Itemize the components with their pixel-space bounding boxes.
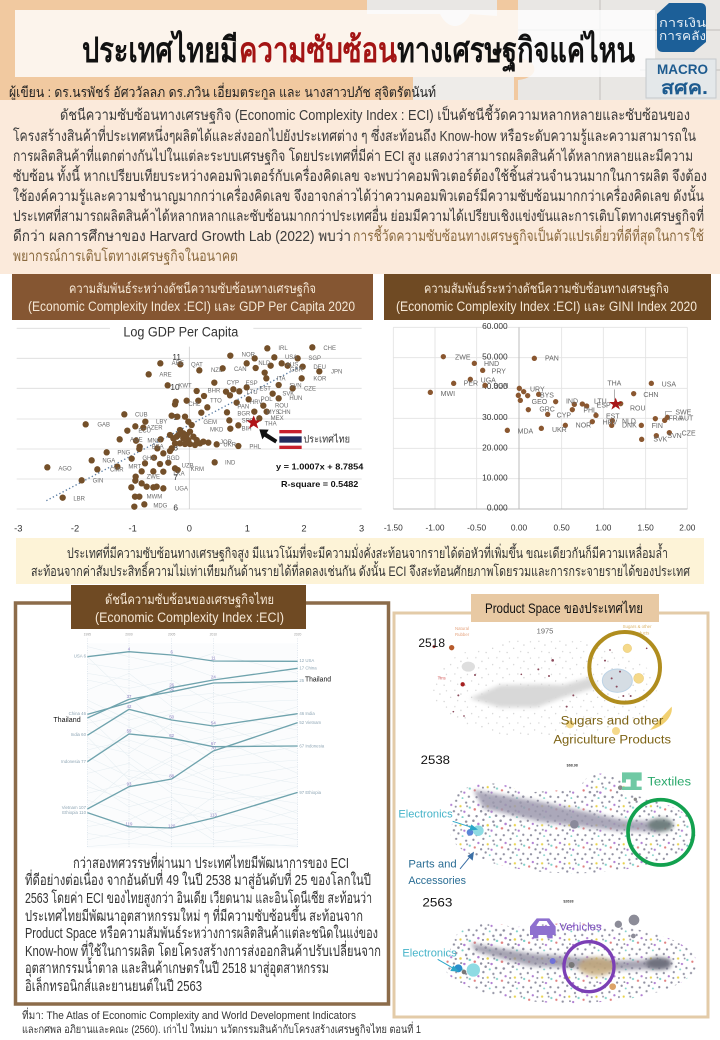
scatter chart: ECI vs GINI: LTU — [594, 398, 607, 405]
scatter chart: ECI vs log GDP per capita: MWM — [147, 494, 162, 500]
Thailand star marker — [246, 415, 261, 429]
label: textiles: Textiles — [647, 775, 691, 789]
heading: ECI vs GINI — [384, 274, 711, 320]
scatter chart: ECI vs log GDP per capita: CUB — [135, 412, 148, 418]
header background with puzzle pieces — [0, 0, 720, 100]
scatter chart: ECI vs log GDP per capita: LBR — [73, 496, 86, 502]
scatter chart: ECI vs log GDP per capita: GHA — [142, 456, 155, 462]
callout band: conclusion — [16, 538, 704, 584]
scatter chart: ECI vs GINI: IND — [566, 399, 578, 406]
slope chart: ECI rank: 88 — [169, 774, 175, 779]
scatter chart: ECI vs log GDP per capita: QAT — [191, 362, 203, 368]
scatter chart: ECI vs GINI: CHN — [643, 392, 658, 399]
slope chart: ECI rank: Indonesia 77 — [61, 759, 87, 764]
scatter chart: ECI vs log GDP per capita: SRB — [242, 418, 254, 424]
scatter chart: ECI vs log GDP per capita: SVK — [282, 392, 294, 398]
scatter chart: ECI vs log GDP per capita: AGE — [130, 437, 143, 443]
icon: Thai flag — [279, 430, 302, 449]
arrow: parts — [460, 852, 474, 869]
slope chart: ECI rank — [53, 633, 331, 848]
scatter chart: ECI vs GINI: 2.00 — [679, 522, 696, 532]
scatter chart: ECI vs log GDP per capita: CMR — [110, 467, 124, 473]
slope chart: ECI rank: 2005 — [168, 633, 176, 637]
logo: public finance badge — [657, 3, 706, 52]
arrow: electronics — [453, 821, 478, 831]
source notes: และกศพล อภิยานและคณะ (2560). เก่าไป ใหม่มา นวัตกรรมสินค้ากับโครงสร้างเศรษฐกิจไทย ตอนที่ 1 — [22, 1021, 421, 1036]
scatter chart: ECI vs GINI: CZE — [682, 431, 696, 438]
scatter chart: ECI vs log GDP per capita: UGA — [175, 486, 188, 492]
scatter chart: ECI vs GINI: -1.50 — [384, 522, 403, 532]
scatter chart: ECI vs log GDP per capita: GIN — [93, 478, 103, 484]
title banner: ทางเศรษฐกิจแค่ไหน — [397, 29, 635, 73]
scatter chart: ECI vs log GDP per capita: 1 — [245, 524, 250, 534]
scatter chart: ECI vs GINI: URY — [530, 387, 545, 394]
slope chart: ECI rank: 24 — [211, 675, 216, 680]
scatter chart: ECI vs log GDP per capita: THA — [265, 421, 277, 427]
paragraph: ECI development: Product Space หรือความสัมพันธ์ระหว่างการผลิตสินค้าแต่ละชนิดในแง่ของ — [25, 924, 378, 942]
scatter chart: ECI vs log GDP per capita: AUS — [286, 363, 298, 369]
slope chart: ECI rank: 70 — [211, 746, 216, 751]
regression equation: y = 1.0007x + 8.7854 — [276, 461, 364, 471]
scatter chart: ECI vs log GDP per capita: KOR — [313, 376, 327, 382]
scatter chart: ECI vs log GDP per capita: MDG — [153, 504, 168, 510]
slope chart: ECI rank: 120 — [168, 823, 176, 828]
scatter chart: ECI vs log GDP per capita: NZL — [211, 368, 223, 374]
paragraph: ECI development: 2563 โดยค่า ECI ของไทยสูงกว่า อินเดีย เวียดนาม และอินโดนีเซีย สะท้อนว่า — [25, 889, 372, 907]
scatter chart: ECI vs GINI: FRA — [668, 416, 683, 423]
scatter chart: ECI vs GINI: MWI — [441, 391, 455, 398]
scatter chart: ECI vs GINI: UGA — [481, 377, 496, 384]
scatter chart: ECI vs log GDP per capita: BSA — [152, 444, 164, 450]
scatter chart: ECI vs log GDP per capita: CZE — [304, 387, 316, 393]
scatter chart: ECI vs log GDP per capita: GBR — [290, 368, 304, 374]
scatter chart: ECI vs GINI: ZWE — [455, 355, 471, 362]
title banner — [15, 10, 655, 77]
scatter chart: ECI vs log GDP per capita: ECU — [138, 429, 151, 435]
scatter chart: ECI vs log GDP per capita: ITA — [277, 376, 286, 382]
scatter chart: ECI vs GINI: 0.00 — [511, 522, 527, 532]
network: product space 2538 — [398, 753, 697, 887]
scatter chart: ECI vs log GDP per capita: AZER — [147, 425, 163, 431]
Thailand star marker — [609, 398, 622, 410]
scatter chart: ECI vs log GDP per capita: MNG — [147, 438, 162, 444]
logo: MACRO: สศค. — [661, 78, 708, 99]
scatter chart: ECI vs GINI: 0.50 — [554, 522, 570, 532]
slope chart: ECI rank: 12 USA — [299, 658, 314, 663]
slope chart: ECI rank: 2000 — [125, 633, 133, 637]
label: electronics 2563: Electronics — [402, 947, 457, 959]
scatter chart: ECI vs GINI: SWE — [675, 410, 692, 417]
scatter chart: ECI vs log GDP per capita: PNG — [117, 450, 131, 456]
icon: car — [530, 918, 556, 938]
scatter chart: ECI vs GINI: BYS — [540, 392, 554, 399]
network: product space 2518: 1975 — [537, 626, 553, 635]
panel heading — [71, 585, 306, 629]
slope chart: ECI rank: China 46 — [69, 711, 87, 716]
scatter chart: ECI vs GINI: ROU — [630, 406, 646, 413]
scatter chart: ECI vs GINI: ESP — [597, 402, 611, 409]
label: parts and accessories: Accessories — [408, 875, 466, 887]
slope chart: ECI rank: 42 — [127, 704, 132, 709]
logo: MACRO — [646, 59, 716, 99]
scatter chart: ECI vs log GDP per capita: SVN — [289, 383, 302, 389]
scatter chart: ECI vs log GDP per capita: 10 — [170, 382, 180, 392]
scatter chart: ECI vs log GDP per capita: IND — [225, 460, 236, 466]
scatter chart: ECI vs log GDP per capita: ZWE — [147, 474, 160, 480]
scatter chart: ECI vs log GDP per capita: 11 — [172, 352, 181, 362]
logo: public finance badge: การคลัง — [659, 29, 706, 43]
scatter chart: ECI vs log GDP per capita: 2 — [301, 524, 307, 534]
heading: ECI vs GDP — [12, 274, 373, 320]
scatter chart: ECI vs log GDP per capita: BIH — [242, 427, 252, 433]
slope chart: ECI rank: 113 — [210, 813, 217, 818]
scatter chart: ECI vs log GDP per capita: TTO — [210, 398, 222, 404]
scatter chart: ECI vs GINI: 40.000 — [482, 381, 508, 391]
scatter chart: ECI vs log GDP per capita: PHL — [249, 445, 262, 451]
scatter chart: ECI vs log GDP per capita: NGA — [102, 458, 115, 464]
scatter chart: ECI vs log GDP per capita: UKR — [223, 443, 237, 449]
scatter chart: ECI vs GINI: AUT — [679, 416, 694, 423]
logo: MACRO: MACRO — [657, 61, 708, 77]
r-square: R-square = 0.5482 — [281, 479, 359, 489]
scatter chart: ECI vs log GDP per capita: JOR — [220, 440, 233, 446]
slope chart: ECI rank: USA 6 — [74, 653, 87, 658]
panel heading: ดัชนีความซับซ้อนของเศรษฐกิจไทย — [105, 592, 274, 608]
scatter chart: ECI vs GINI: EST — [606, 413, 620, 420]
scatter chart: ECI vs GINI: UKR — [552, 427, 567, 434]
label: parts and accessories — [408, 858, 466, 887]
scatter chart: ECI vs GINI: DNK — [622, 423, 637, 430]
slope chart: ECI rank: India 60 — [71, 732, 87, 737]
label: Thailand left: Thailand — [53, 717, 81, 724]
scatter chart: ECI vs GINI: 0.000 — [487, 503, 508, 513]
scatter chart: ECI vs GINI: -1.00 — [426, 522, 445, 532]
scatter chart: ECI vs log GDP per capita: BHR — [208, 389, 221, 395]
slope chart: ECI rank: 32 — [169, 686, 175, 691]
scatter chart: ECI vs log GDP per capita: GAB — [97, 422, 110, 428]
slope chart: ECI rank: 17 China — [299, 666, 317, 671]
network: product space 2518 — [418, 624, 672, 746]
label: Thailand right: Thailand — [305, 677, 331, 684]
slope chart: ECI rank: 52 Vietnam — [299, 720, 322, 725]
heading: ECI vs GINI: ความสัมพันธ์ระหว่างดัชนีความซับซ้อนทางเศรษฐกิจ — [424, 280, 669, 297]
highlight circle: textiles — [628, 800, 693, 865]
slope chart: ECI rank: 62 — [169, 733, 175, 738]
label: year 2538: 2538 — [421, 753, 450, 767]
slope chart: ECI rank: 119 — [126, 821, 133, 826]
label: electronics 2538: Electronics — [398, 808, 453, 820]
scatter chart: ECI vs log GDP per capita: CAN — [234, 367, 247, 373]
logo: public finance badge: การเงิน — [659, 16, 706, 30]
scatter chart: ECI vs GINI: GEO — [532, 399, 548, 406]
slope chart: ECI rank: Vietnam 107 — [62, 805, 87, 810]
highlight circle: vehicles — [564, 942, 614, 992]
scatter chart: ECI vs log GDP per capita: 9 — [173, 412, 178, 422]
scatter chart: ECI vs log GDP per capita: ARE — [159, 372, 172, 378]
paragraph: ECI development — [25, 852, 381, 995]
network: product space 2538: $68.98 — [567, 763, 578, 767]
slope chart: ECI rank: 97 Ethiopia — [299, 790, 322, 795]
scatter chart: ECI vs log GDP per capita: UZB — [182, 463, 194, 469]
scatter chart: ECI vs log GDP per capita: MRT — [128, 464, 142, 470]
scatter chart: ECI vs log GDP per capita: CHL — [188, 402, 201, 408]
paragraph: ECI development: Know-how ที่ใช้ในการผลิต โดยโครงสร้างการส่งออกสินค้าปรับเปลี่ยนจาก — [25, 940, 381, 960]
scatter chart: ECI vs log GDP per capita: ESP — [246, 381, 258, 387]
slope chart: ECI rank: 25 — [299, 678, 305, 683]
paragraph: ECI development: กว่าสองทศวรรษที่ผ่านมา ประเทศไทยมีพัฒนาการของ ECI — [73, 852, 349, 872]
scatter chart: ECI vs GINI: BGN — [493, 383, 508, 390]
slope chart: ECI rank: 2010 — [210, 633, 217, 637]
scatter chart: ECI vs GINI: FIN — [652, 423, 663, 430]
label: sugars and agriculture — [553, 714, 671, 746]
scatter chart: ECI vs GINI: PHL — [583, 407, 597, 414]
panel: product space — [394, 594, 708, 1017]
source notes: ที่มา: The Atlas of Economic Complexity and World Development Indicators — [22, 1007, 356, 1022]
heading: ECI vs GDP: ความสัมพันธ์ระหว่างดัชนีความซับซ้อนทางเศรษฐกิจ — [69, 280, 316, 297]
scatter chart: ECI vs GINI: PAN — [545, 356, 559, 363]
scatter chart: ECI vs log GDP per capita: KWT — [178, 384, 192, 390]
scatter chart: ECI vs log GDP per capita: USA — [285, 355, 297, 361]
network: product space 2518: Rubber — [455, 632, 470, 637]
scatter chart: ECI vs log GDP per capita: MKD — [210, 428, 224, 434]
scatter chart: ECI vs log GDP per capita: SGP — [308, 356, 321, 362]
intro text block: ดีกว่า ผลการศึกษาของ Harvard Growth Lab (2022) พบว่า — [13, 228, 351, 245]
scatter chart: ECI vs log GDP per capita: BGR — [237, 411, 251, 417]
intro text block — [0, 100, 720, 274]
panel heading: Product Space ของประเทศไทย — [485, 600, 643, 616]
scatter chart: ECI vs log GDP per capita: CHN — [278, 410, 291, 416]
panel: Thailand ECI — [16, 585, 388, 1004]
scatter chart: ECI vs GINI: NOR — [576, 423, 591, 430]
icon: sewing machine — [622, 772, 642, 790]
slope chart: ECI rank: 67 — [211, 741, 216, 746]
slope chart: ECI rank: 46 India — [299, 711, 315, 716]
paragraph: ECI development: ประเทศไทยมีพัฒนาอุตสาหกรรมใหม่ ๆ ที่มีความซับซ้อนขึ้น สะท้อนจาก — [25, 905, 363, 926]
intro text block: พยากรณ์การเติบโตทางเศรษฐกิจในอนาคต — [13, 247, 238, 265]
scatter chart: ECI vs log GDP per capita: GEM — [203, 420, 217, 426]
scatter chart: ECI vs log GDP per capita — [14, 325, 364, 534]
label: parts and accessories: Parts and — [408, 858, 457, 870]
scatter chart: ECI vs GINI: NLD — [622, 419, 636, 426]
slope chart: ECI rank: 67 Indonesia — [299, 743, 325, 748]
scatter chart: ECI vs log GDP per capita: NOR — [242, 353, 256, 359]
scatter chart: ECI vs GINI: SVN — [667, 433, 682, 440]
heading: ECI vs GDP: (Economic Complexity Index :ECI) และ GDP Per Capita 2020 — [28, 299, 355, 314]
slope chart: ECI rank: 26 — [169, 682, 175, 687]
slope chart: ECI rank: 2020 — [294, 633, 302, 637]
paragraph: ECI development: ที่ดีอย่างต่อเนื่อง จากอันดับที่ 49 ในปี 2538 มาสู่อันดับที่ 25 ของโลกในปี — [25, 869, 371, 889]
slope chart: ECI rank: 4 — [128, 646, 131, 651]
scatter chart: ECI vs GINI — [384, 321, 696, 532]
label: year 2518: 2518 — [418, 636, 445, 650]
scatter chart: ECI vs GINI: GRC — [539, 407, 555, 414]
scatter chart: ECI vs log GDP per capita: BGD — [167, 456, 180, 462]
scatter chart: ECI vs GINI: 1.50 — [638, 522, 654, 532]
scatter chart: ECI vs log GDP per capita: EST — [259, 386, 271, 392]
scatter chart: ECI vs log GDP per capita: KRM — [191, 467, 204, 473]
scatter chart: ECI vs log GDP per capita: MYS — [267, 410, 280, 416]
slope chart: ECI rank: 93 — [127, 781, 132, 786]
panel heading — [471, 594, 659, 622]
scatter chart: ECI vs log GDP per capita: AGO — [58, 467, 72, 473]
scatter chart: ECI vs GINI: SVK — [653, 437, 668, 444]
scatter chart: ECI vs GINI: HND — [484, 361, 499, 368]
source notes — [22, 1007, 421, 1036]
slope chart: ECI rank: 50 — [169, 715, 175, 720]
scatter chart: ECI vs log GDP per capita: -3 — [14, 524, 22, 534]
highlight circle: sugars — [589, 632, 660, 703]
network: product space 2518: Natural — [455, 626, 469, 631]
scatter chart: ECI vs log GDP per capita: PAN — [237, 404, 249, 410]
scatter chart: ECI vs GINI: 60.000 — [482, 321, 508, 331]
slope chart: ECI rank: 37 — [127, 694, 132, 699]
arrow: electronics — [438, 959, 459, 972]
scatter chart: ECI vs log GDP per capita: LKA — [173, 472, 185, 478]
slope chart: ECI rank: Ethiopia 110 — [62, 810, 87, 815]
scatter chart: ECI vs log GDP per capita: IRL — [278, 346, 288, 352]
scatter chart: ECI vs GINI: USA — [662, 381, 676, 388]
scatter chart: ECI vs log GDP per capita: ARE — [172, 361, 184, 367]
scatter chart: ECI vs GINI: PER — [464, 381, 478, 388]
title banner: ประเทศไทยมี — [82, 29, 238, 70]
arrow to Thailand — [259, 429, 277, 443]
scatter chart: ECI vs log GDP per capita: DEU — [313, 365, 326, 371]
scatter chart: ECI vs GINI: PRY — [492, 369, 506, 376]
scatter chart: ECI vs log GDP per capita: 3 — [359, 524, 364, 534]
scatter chart: ECI vs GINI: 20.000 — [482, 442, 508, 452]
authors: ผู้เขียน : ดร.นรพัชร์ อัศววัลลภ ดร.ภวิน เอี่ยมตระกูล และ นางสาวปภัช สุจิตรัตนันท์ — [9, 83, 436, 101]
scatter chart: ECI vs GINI: CYP — [557, 412, 571, 419]
slope chart: ECI rank: 6 — [170, 650, 173, 655]
slope chart: ECI rank: 11 — [211, 656, 216, 661]
label: Thailand: ประเทศไทย — [303, 434, 350, 446]
label: year 2563: 2563 — [422, 896, 452, 910]
scatter chart: ECI vs log GDP per capita: ROU — [275, 403, 288, 409]
label: sugars and agriculture: Sugars and other — [561, 714, 663, 728]
scatter chart: ECI vs log GDP per capita: POL — [261, 397, 273, 403]
scatter chart: ECI vs GINI: HRV — [603, 420, 618, 427]
slope chart: ECI rank: 54 — [211, 721, 216, 726]
scatter chart: ECI vs log GDP per capita: CYP — [227, 380, 239, 386]
paragraph: ECI development: อุตสาหกรรมน้ำตาล และสินค้าเกษตรในปี 2518 มาสู่อุตสาหกรรม — [25, 957, 329, 978]
scatter chart: ECI vs GINI: 50.000 — [482, 351, 508, 361]
scatter chart: ECI vs log GDP per capita: NLD — [258, 361, 271, 367]
label: vehicles: Vehicles — [559, 922, 602, 934]
scatter chart: ECI vs log GDP per capita: 6 — [173, 503, 178, 513]
scatter chart: ECI vs GINI: THA — [607, 380, 622, 387]
scatter chart: ECI vs GINI: 30.000 — [482, 412, 508, 422]
scatter chart: ECI vs log GDP per capita: -2 — [71, 524, 79, 534]
scatter chart: ECI vs log GDP per capita: CHE — [323, 346, 336, 352]
scatter chart: ECI vs log GDP per capita: 0 — [187, 524, 192, 534]
slope chart: ECI rank: 1995 — [84, 633, 91, 637]
label: sugars and agriculture: Agriculture Products — [553, 732, 671, 746]
scatter chart: ECI vs log GDP per capita: LBY — [156, 420, 167, 426]
scatter chart: ECI vs log GDP per capita: HUN — [289, 396, 302, 402]
scatter chart: ECI vs log GDP per capita: 8 — [173, 443, 178, 453]
scatter chart: ECI vs log GDP per capita: -1 — [129, 524, 137, 534]
network: product space 2563 — [402, 896, 697, 1003]
slope chart: ECI rank: 59 — [127, 729, 132, 734]
scatter chart: ECI vs GINI: MDA — [518, 429, 534, 436]
scatter chart: ECI vs log GDP per capita: JPN — [331, 369, 342, 375]
scatter chart: ECI vs GINI: 10.000 — [482, 472, 508, 482]
scatter chart: ECI vs log GDP per capita: HRV — [250, 400, 263, 406]
scatter chart: ECI vs GINI: -0.50 — [467, 522, 487, 532]
title banner: ความซับซ้อน — [239, 31, 397, 70]
network: product space 2518: Sugars & other — [623, 624, 652, 629]
scatter chart: ECI vs log GDP per capita: 7 — [173, 472, 178, 482]
scatter chart: ECI vs log GDP per capita: MEX — [271, 416, 284, 422]
icon: wheat — [650, 707, 672, 730]
network: product space 2518: products — [633, 631, 649, 636]
network: product space 2518: Tins — [438, 676, 446, 681]
network: product space 2563: $2638 — [563, 899, 574, 903]
scatter chart: ECI vs GINI: 1.00 — [595, 522, 612, 532]
panel heading: (Economic Complexity Index :ECI) — [95, 610, 284, 625]
paragraph: ECI development: อิเล็กทรอนิกส์และยานยนต์ในปี 2563 — [25, 976, 202, 995]
scatter chart: ECI vs log GDP per capita: Log GDP Per Capita — [123, 325, 239, 340]
scatter chart: ECI vs log GDP per capita: LTU — [247, 390, 258, 396]
